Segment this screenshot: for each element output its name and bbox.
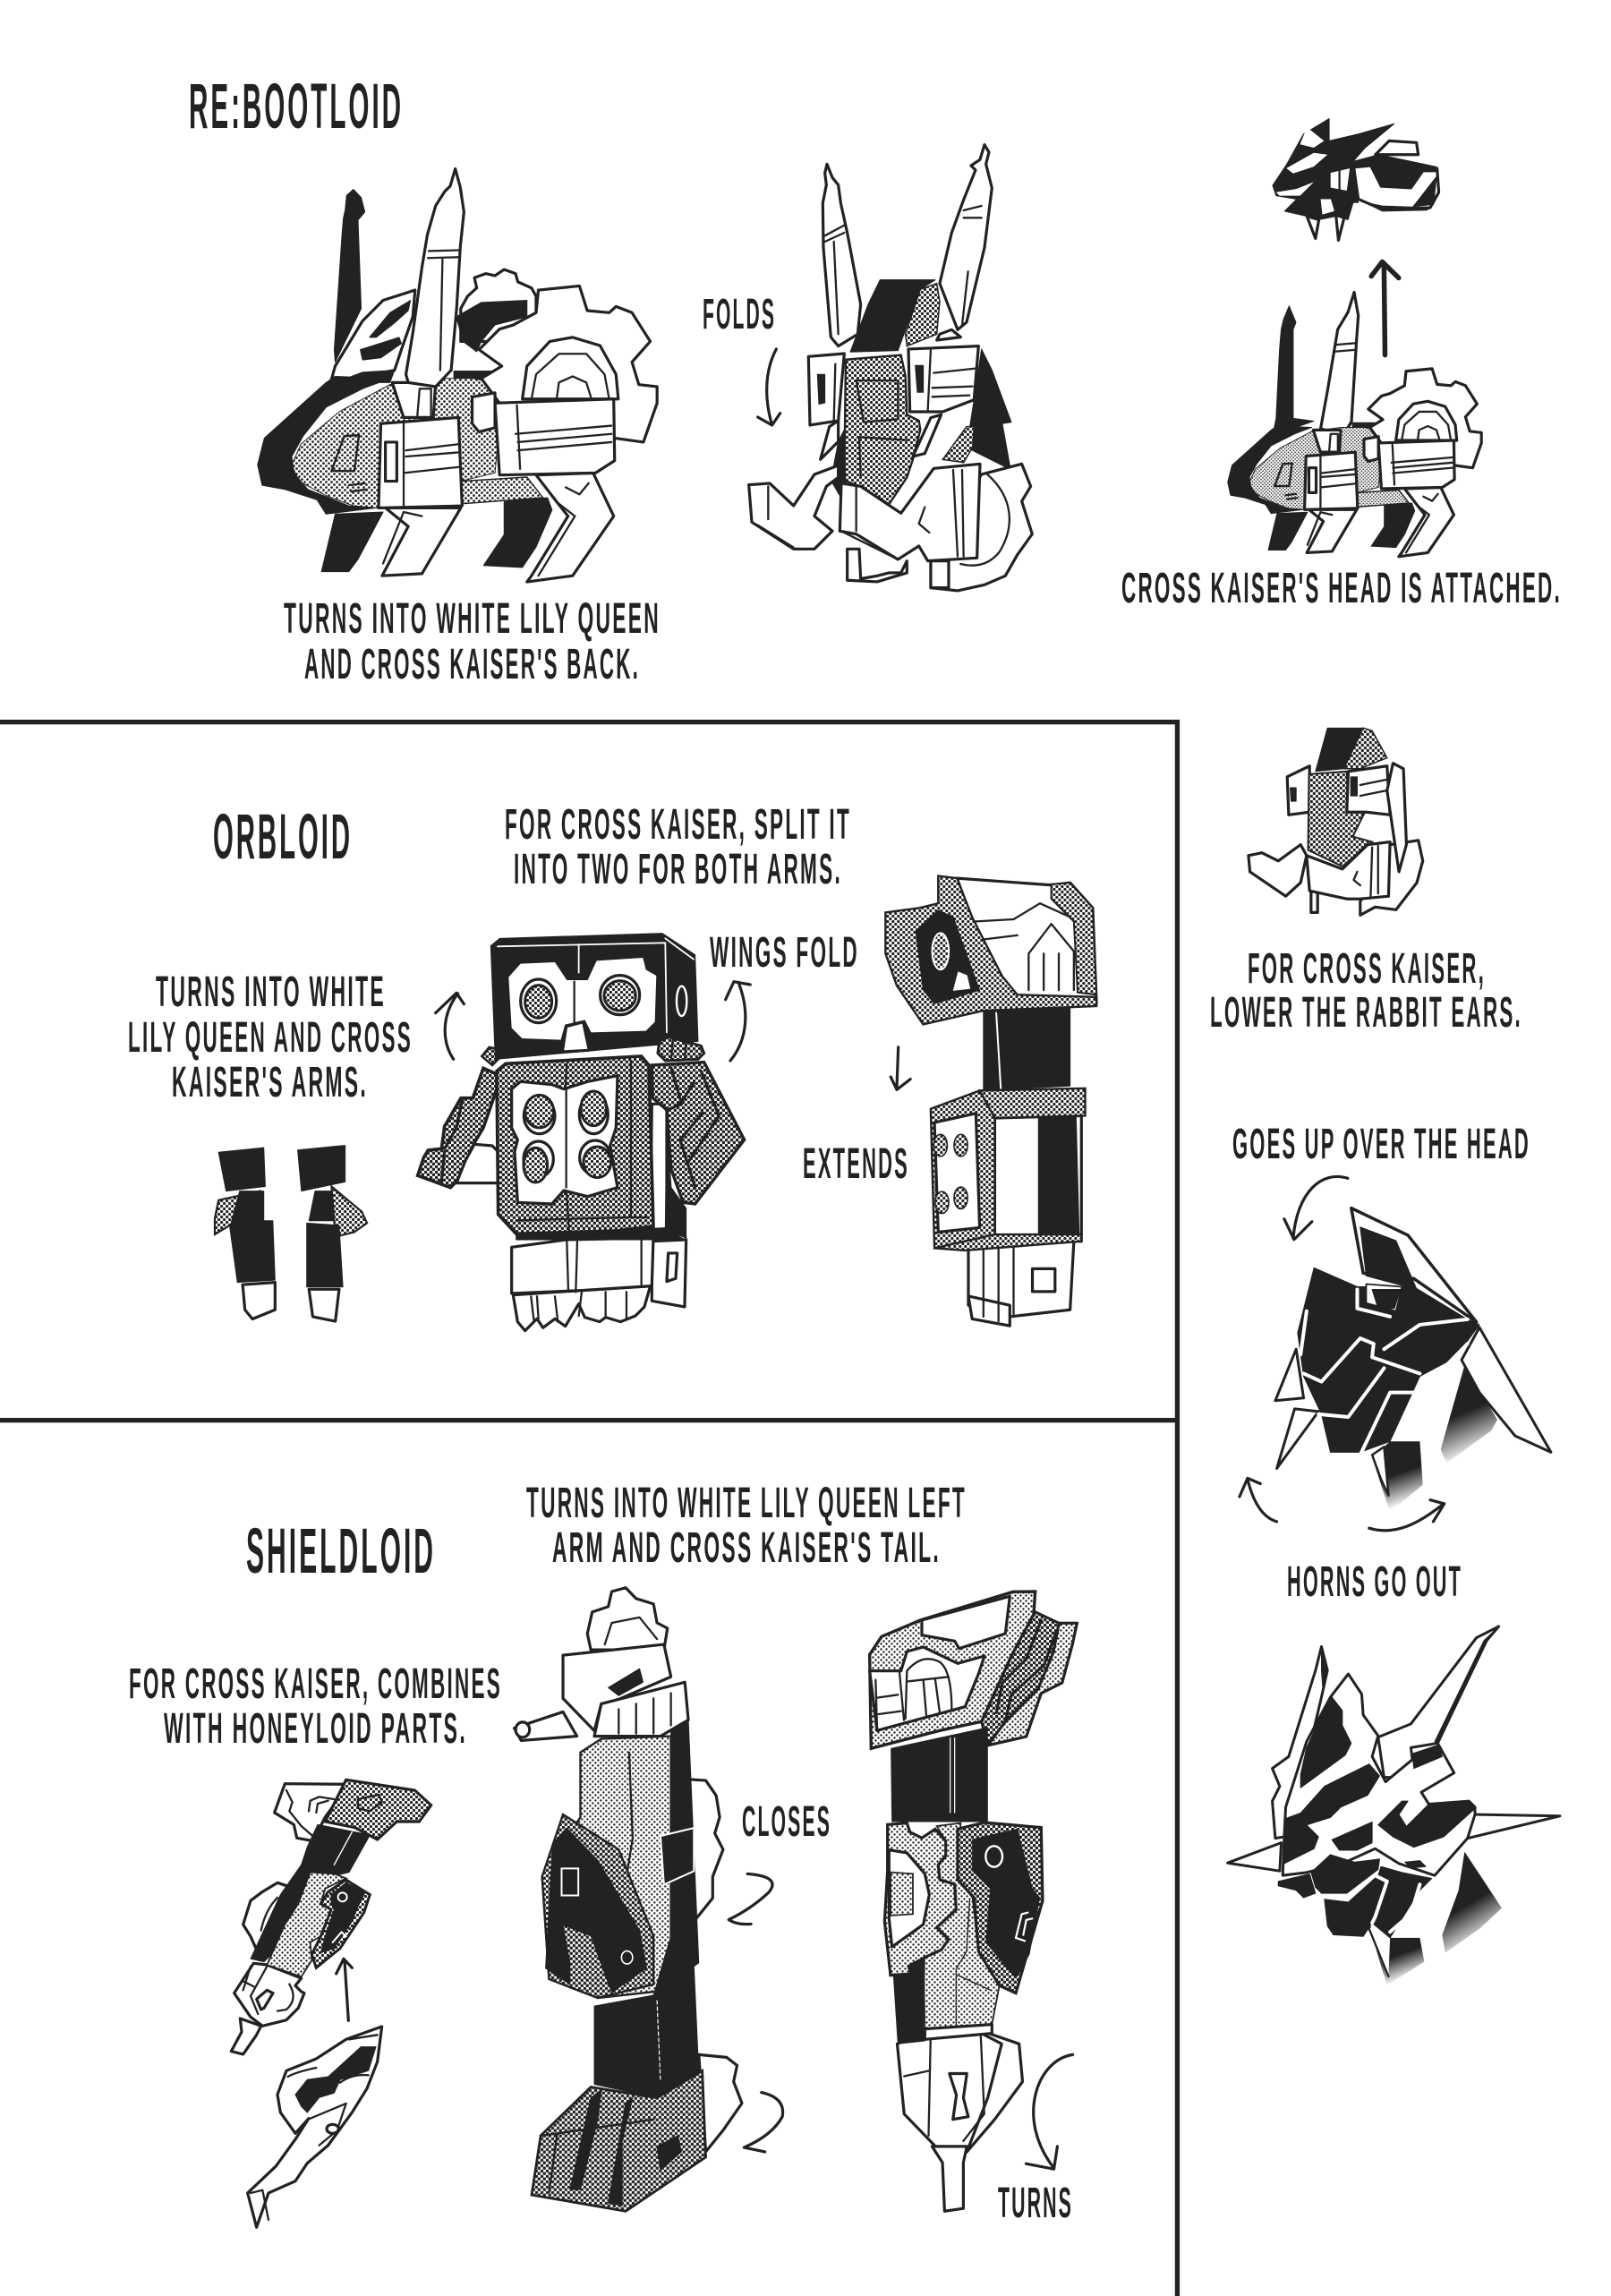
halftone head [325,1780,431,1839]
ribs [982,1611,1077,1745]
text: FOR CROSS KAISER, COMBINES [129,1660,502,1708]
label: lower the rabbit ears [1210,945,1522,1037]
black column [891,1728,987,1822]
label: turns into left arm and tail [526,1480,967,1572]
gear [1360,841,1423,915]
gear top [587,1588,668,1650]
rabbit front ear [406,169,464,387]
text: FOR CROSS KAISER, SPLIT IT [505,801,851,849]
left leg [749,465,839,549]
halftone center [844,355,920,504]
bottom block [968,1242,1074,1317]
right ear [940,145,992,329]
small rabbit back ear [1273,306,1314,436]
lower column [994,1115,1081,1242]
illustration: Shieldloid right figure [870,1592,1077,2211]
window tower top [957,878,1096,1003]
label: turns into white lily queen [284,595,661,688]
label: split it [505,801,851,893]
text: TURNS INTO WHITE LILY QUEEN [284,595,661,643]
side port [677,986,686,1016]
armor [958,1822,1043,1993]
left horns [1275,1349,1304,1401]
rear gear behind body [461,269,536,341]
middle panel [980,1088,1085,1118]
armor [542,1814,653,1998]
label: combines with honeyloid: WITH HONEYLOID PARTS. [164,1705,467,1753]
halftone center [1308,772,1372,866]
rabbit back ear [334,190,365,362]
text: AND CROSS KAISER'S BACK. [304,641,640,688]
illustration: Orbloid robot form [418,934,750,1331]
left box [1287,766,1309,815]
lower part [897,2030,1073,2211]
torso [497,1056,653,1233]
arm one [218,1148,265,1191]
left crest [1273,1647,1327,1839]
black lower strip [893,1958,925,2044]
main helmet [1298,1267,1479,1452]
text: SHIELDLOID [246,1516,436,1587]
stubs [848,549,907,582]
text: INTO TWO FOR BOTH ARMS. [514,846,842,893]
label: turns into arms [128,969,413,1106]
foot [532,2070,706,2211]
right horn [1462,1327,1551,1452]
skirt teeth [513,1286,651,1331]
label: combines with honeyloid [129,1660,502,1753]
left knob [482,1047,499,1065]
skirt back block [652,1240,686,1307]
wing right [652,1063,745,1204]
text: LILY QUEEN AND CROSS [128,1014,413,1062]
nozzle [515,1711,577,1740]
skirt [512,1238,653,1293]
illustration: head with crest moving [1240,1176,1551,1531]
text: TURNS [998,2180,1073,2227]
arrow: folds [758,349,780,425]
head prongs [1307,199,1348,240]
window head [870,1592,1036,1748]
spiked crest [1273,119,1394,219]
side gears [688,1780,723,1920]
body light [542,1737,671,1998]
head crest bump [1376,141,1419,155]
small rabbit front ear [1321,293,1359,436]
arm two [298,1146,345,1191]
black strip [653,1720,699,1995]
black back ear [967,349,1011,468]
right box [1347,766,1390,815]
lowered ear [1387,764,1406,872]
neck collar [1372,1447,1388,1496]
label: turns into arms: TURNS INTO WHITE [156,969,386,1016]
helmet plate [1283,1674,1475,1875]
rear gear [931,464,1032,591]
arm left [418,1068,497,1188]
illustration: Orbloid extended arm [885,876,1096,1326]
neck black [1369,1926,1424,1985]
illustration: rabbit with head attached [1228,369,1481,557]
ribbed collar [594,1682,688,1737]
black top [1316,728,1363,772]
light body [267,1873,346,1976]
chest plate [512,1076,618,1204]
right shoulder box [908,346,978,412]
armor [311,1880,370,1967]
upper horn [1378,1626,1499,1778]
visor [1353,163,1439,209]
head [490,934,698,1059]
light body [924,1823,1000,2029]
face eyes [521,979,557,1023]
honeyloid shield [248,2027,382,2227]
illustration: Shieldloid center figure [515,1588,783,2211]
upper black column [984,1009,1070,1090]
text: WINGS FOLD [710,929,859,977]
arrow: extends [891,1047,910,1089]
arrows: wings fold [436,993,464,1059]
neck [1372,1441,1423,1512]
face plate [508,958,656,1040]
illustration: lowered rabbit ears [1249,728,1423,915]
side gear [243,1882,291,1950]
text: ORBLOID [213,802,353,873]
top fin [1351,1208,1477,1322]
label: turns into arms: KAISER'S ARMS. [172,1059,368,1106]
text: RE:BOOTLOID [189,72,404,142]
head box [563,1644,671,1731]
black struts [831,430,846,499]
illustration: Re:Bootloid rabbit form [258,169,657,582]
side strip [651,1104,667,1229]
text: CLOSES [742,1798,831,1846]
black patches [1278,1697,1475,1938]
illustration: head with horns out [1228,1626,1560,1985]
text: FOLDS [703,291,776,338]
chest eyes [524,1091,611,1182]
black strip [251,1865,313,1962]
panel frames [0,720,1180,2296]
label: turns into left arm and tail: ARM AND CROSS KAISER'S TAIL. [552,1524,941,1572]
lower black column [594,1966,699,2098]
left shoulder box [808,354,844,425]
center leg [840,464,980,561]
tail [231,2019,261,2054]
gear [884,1823,956,1976]
upper part [870,1592,1077,2044]
text: EXTENDS [803,1140,909,1188]
arrow: up [337,1959,352,2020]
arrow: up [1371,261,1399,355]
right knob [658,1037,704,1061]
legs [1249,845,1307,896]
black column [302,1824,370,1875]
illustration: Shieldloid combined with Honeyloid part [231,1780,431,2227]
rabbit wing [330,290,415,382]
illustration: Orbloid split arms [215,1146,367,1321]
torso side black [665,1128,686,1238]
left ear [823,164,861,346]
illustration: Cross Kaiser's head [1273,119,1439,436]
gear top [275,1784,349,1841]
illustration: folded Re:Bootloid [749,145,1032,591]
lower white part [234,1963,304,2026]
arrows: closes [729,1874,772,1925]
rabbit body and legs [258,286,657,582]
center block [1329,166,1351,192]
band [925,2025,992,2039]
nose [559,1020,597,1054]
arrows [1284,1176,1348,1240]
text: TURNS INTO WHITE LILY QUEEN LEFT [526,1480,967,1527]
side horns [1228,1843,1282,1871]
